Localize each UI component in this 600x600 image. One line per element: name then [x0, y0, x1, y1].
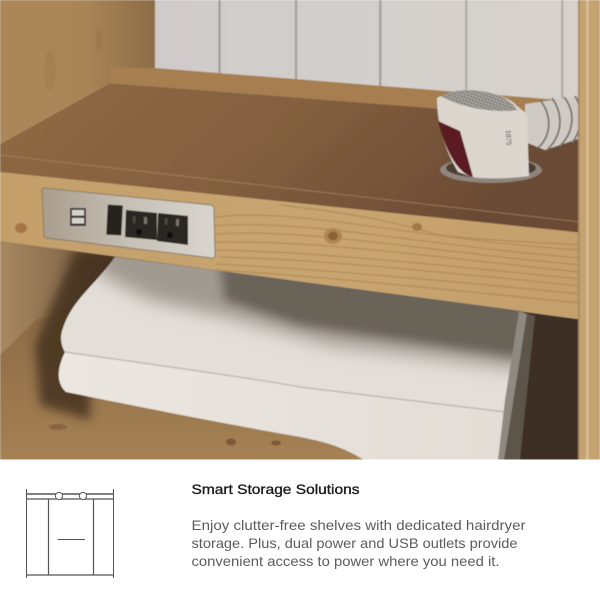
shadow beside towels	[35, 250, 130, 420]
left side wall, lower	[0, 240, 112, 355]
power outlet plate	[42, 188, 215, 258]
towel shading	[96, 256, 522, 378]
photo: vanity shelf interior	[0, 0, 600, 460]
shelf front edge	[0, 172, 585, 320]
left side wall, upper	[0, 0, 155, 144]
icon: vanity cabinet diagram	[26, 489, 114, 578]
vent grille	[441, 90, 517, 111]
towel: lower	[59, 352, 505, 460]
dryer label: 1875	[504, 130, 512, 146]
back wall panelling	[154, 0, 578, 100]
towel hem	[498, 311, 527, 460]
towels	[58, 256, 528, 460]
rear ledge	[109, 67, 556, 112]
USB ports	[70, 208, 86, 226]
rocker switch	[106, 205, 123, 235]
hose	[525, 96, 581, 150]
heading: Smart Storage Solutions	[192, 481, 360, 497]
holder ring	[440, 161, 542, 184]
floor wood knots	[49, 424, 281, 446]
outlet: right	[157, 213, 188, 245]
body text: Enjoy clutter-free shelves with dedicated hairdryer	[192, 517, 526, 533]
dryer body	[437, 92, 529, 178]
wood knots	[15, 223, 422, 244]
towel: upper	[60, 256, 512, 412]
towel fold line	[65, 352, 505, 412]
right wood post	[578, 0, 600, 460]
maroon side panel	[438, 121, 473, 177]
body text: convenient access to power where you need it.	[192, 553, 500, 569]
lower compartment back	[124, 257, 579, 460]
body text: storage. Plus, dual power and USB outlets provide	[192, 535, 518, 551]
lower shelf floor	[0, 318, 364, 460]
towel side shadow	[504, 314, 535, 460]
wood grain on the front edge	[215, 205, 580, 303]
body text	[192, 517, 526, 569]
left wall knots	[44, 28, 103, 90]
shelf top surface	[0, 83, 585, 234]
hairdryer in holder	[437, 90, 581, 183]
outlet: left	[125, 210, 157, 240]
